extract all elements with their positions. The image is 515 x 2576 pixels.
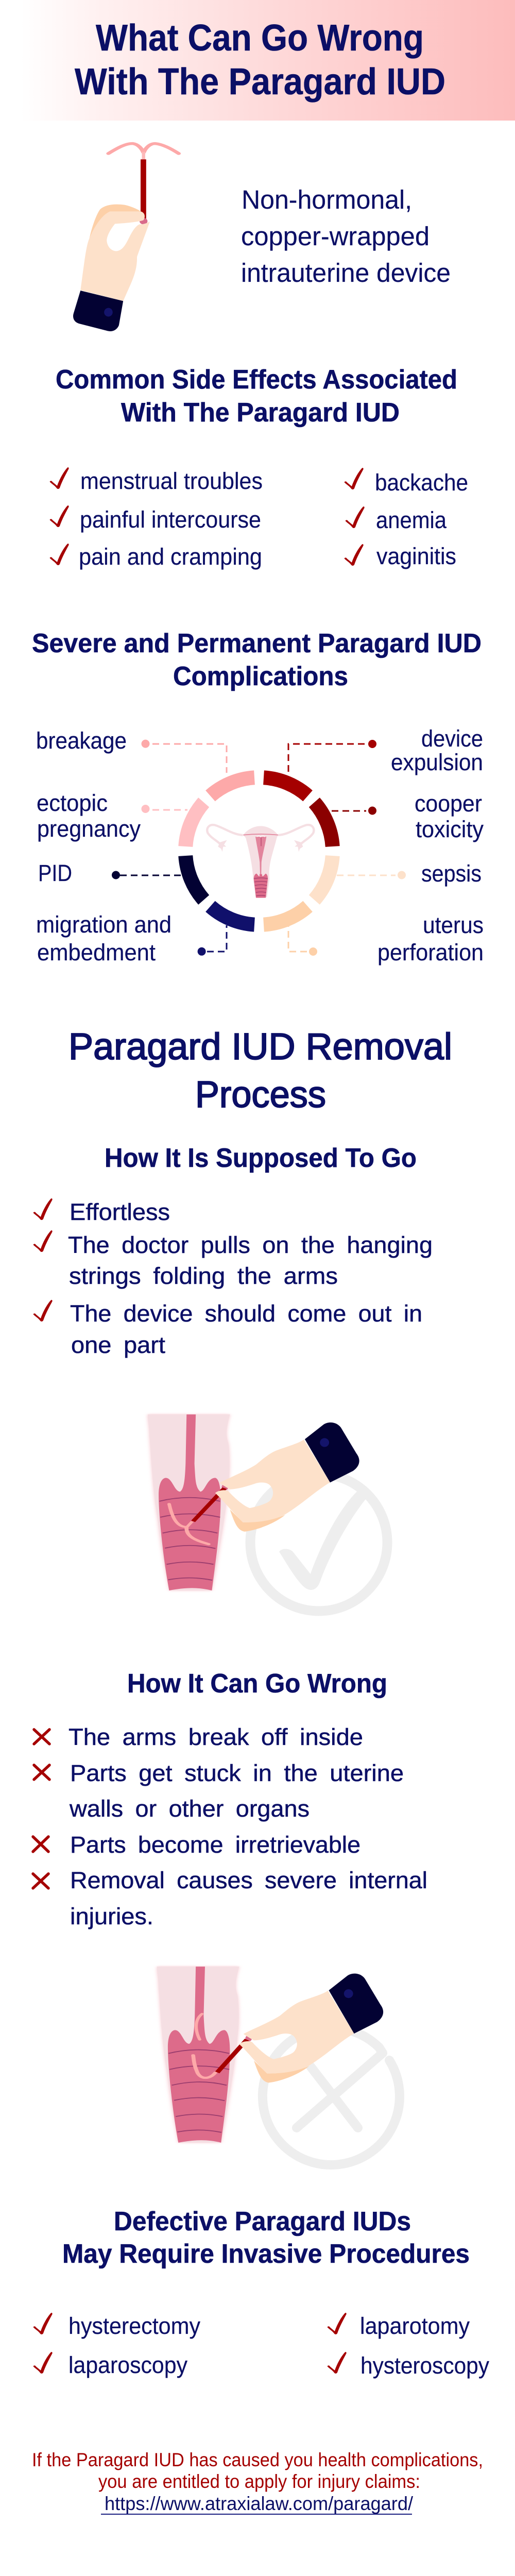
- title: With The Paragard IUD: [75, 61, 445, 103]
- item: Effortless: [70, 1199, 170, 1225]
- icon: check: [49, 544, 69, 565]
- illustration: correct removal: [148, 1414, 387, 1611]
- callout: device expulsion: expulsion: [391, 749, 483, 775]
- heading: common side effects: Common Side Effects Associated: [56, 365, 457, 395]
- callout: ectopic pregnancy: ectopic: [37, 790, 108, 816]
- callout: migration and embedment: embedment: [37, 939, 156, 965]
- icon: check: [328, 2313, 347, 2334]
- banner: title background: [0, 0, 515, 121]
- item: The doctor pulls on the hanging: [68, 1232, 433, 1258]
- callout: ectopic pregnancy: [37, 790, 187, 842]
- chart: complications ring: [36, 725, 484, 965]
- item: The device should come out in: [70, 1300, 422, 1327]
- callout: breakage: [36, 727, 227, 773]
- icon: uterine canal with IUD and hand: [148, 1414, 359, 1590]
- icon: check: [33, 1198, 53, 1220]
- item: anemia: [376, 507, 447, 533]
- intro text: Non-hormonal,: [242, 185, 412, 214]
- callout: migration and embedment: migration and: [36, 911, 171, 938]
- item: [69, 1760, 404, 1822]
- callout: PID: PID: [38, 860, 72, 886]
- icon: x mark: [34, 1730, 49, 1744]
- item: Parts get stuck in the uterine: [70, 1760, 404, 1786]
- item: strings folding the arms: [69, 1263, 338, 1289]
- callout: cooper toxicity: cooper: [415, 790, 482, 817]
- footer call to action: https://www.atraxialaw.com/paragard/: [105, 2493, 414, 2514]
- callout: migration and embedment: [36, 911, 227, 965]
- callout: breakage: breakage: [36, 727, 127, 754]
- callout: device expulsion: device: [421, 725, 483, 752]
- footer call to action: you are entitled to apply for injury claims:: [98, 2471, 420, 2492]
- panel: side effects list: [49, 467, 468, 570]
- heading: invasive procedures: Defective Paragard IUDs: [114, 2207, 411, 2236]
- item: vaginitis: [376, 543, 456, 569]
- icon: check: [33, 2313, 53, 2334]
- footer call to action: If the Paragard IUD has caused you health complications,: [32, 2449, 483, 2470]
- icon: x mark: [33, 1874, 48, 1888]
- title: What Can Go Wrong: [96, 18, 424, 59]
- item: injuries.: [70, 1903, 153, 1929]
- callout: ectopic pregnancy: pregnancy: [37, 816, 141, 842]
- illustration: failed removal: [157, 1967, 400, 2165]
- item: The arms break off inside: [68, 1724, 363, 1750]
- heading: removal process: [68, 1026, 452, 1115]
- panel: supposed to go list: [33, 1198, 433, 1358]
- title: [75, 18, 445, 103]
- heading: common side effects: With The Paragard IUD: [121, 398, 400, 428]
- item: laparoscopy: [68, 2352, 187, 2378]
- callout: cooper toxicity: toxicity: [416, 816, 484, 842]
- heading: severe complications: Severe and Permanent Paragard IUD: [32, 629, 482, 658]
- item: pain and cramping: [79, 544, 262, 570]
- heading: severe complications: Complications: [173, 662, 348, 691]
- panel: can go wrong list: [33, 1724, 427, 1929]
- callout: cooper toxicity: [332, 790, 484, 842]
- item: [68, 1232, 433, 1289]
- heading: removal process: Paragard IUD Removal: [68, 1026, 452, 1067]
- icon: check: [33, 1230, 53, 1252]
- item: Removal causes severe internal: [70, 1867, 427, 1893]
- icon: grey circle check: [250, 1474, 387, 1611]
- item: laparotomy: [360, 2313, 470, 2339]
- callout: device expulsion: [288, 725, 483, 775]
- icon: uterus: [207, 825, 314, 898]
- heading: how it is supposed to go: How It Is Supposed To Go: [105, 1143, 417, 1173]
- heading: removal process: Process: [195, 1074, 326, 1115]
- callout: uterus perforation: [288, 912, 484, 965]
- panel: procedures list: [33, 2313, 489, 2379]
- item: backache: [375, 469, 468, 496]
- item: one part: [71, 1332, 166, 1358]
- icon: check: [344, 544, 364, 566]
- icon: x mark: [33, 1837, 48, 1852]
- item: [70, 1867, 427, 1929]
- icon: hand holding IUD: [73, 144, 179, 331]
- heading: common side effects: [56, 365, 457, 428]
- icon: check: [328, 2352, 347, 2374]
- ring segments: [185, 777, 333, 925]
- item: walls or other organs: [69, 1795, 310, 1822]
- heading: invasive procedures: [62, 2207, 470, 2269]
- icon: grey circle x: [263, 2028, 400, 2165]
- intro text: [241, 185, 451, 287]
- item: painful intercourse: [80, 506, 261, 533]
- icon: check: [49, 505, 69, 527]
- icon: check: [33, 1300, 53, 1321]
- item: Parts become irretrievable: [70, 1832, 360, 1858]
- icon: check: [33, 2352, 53, 2374]
- callout: uterus perforation: perforation: [377, 939, 484, 965]
- item: hysterectomy: [68, 2313, 200, 2339]
- icon: x mark: [34, 1765, 49, 1780]
- icon: uterine canal with broken IUD and hand: [157, 1967, 383, 2143]
- item: menstrual troubles: [80, 468, 263, 494]
- icon: check: [345, 506, 365, 528]
- icon: check: [49, 467, 69, 489]
- callout: sepsis: [337, 860, 482, 887]
- callout: uterus perforation: uterus: [423, 912, 484, 938]
- callout: sepsis: sepsis: [421, 860, 482, 887]
- footer call to action: [32, 2449, 483, 2515]
- callout: PID: [38, 860, 182, 886]
- icon: check: [344, 468, 364, 489]
- intro text: intrauterine device: [241, 258, 451, 287]
- intro text: copper-wrapped: [241, 222, 430, 251]
- heading: invasive procedures: May Require Invasive Procedures: [62, 2239, 470, 2269]
- heading: severe complications: [32, 629, 482, 691]
- item: [70, 1300, 422, 1358]
- item: hysteroscopy: [360, 2352, 489, 2379]
- heading: how it can go wrong: How It Can Go Wrong: [127, 1669, 387, 1699]
